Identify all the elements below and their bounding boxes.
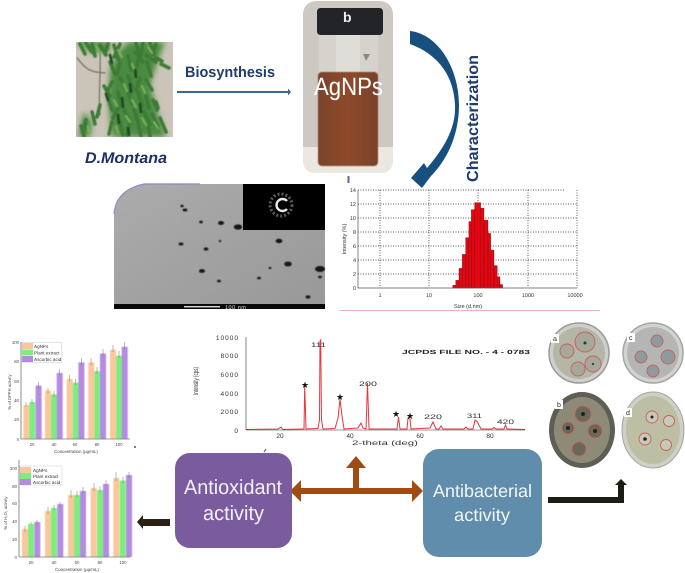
gridlines [358, 190, 577, 288]
x tick labels [276, 433, 494, 440]
x tick labels [29, 560, 127, 565]
y tick labels: 6000 [221, 372, 239, 379]
box: Antibacterial activity [423, 449, 542, 557]
x tick labels: 10000 [567, 293, 583, 299]
peak labels: 220 [424, 414, 443, 421]
star markers [301, 380, 414, 421]
y axis title: Intensity (%) [342, 224, 348, 254]
y tick labels: 12 [350, 202, 356, 208]
x tick labels: 60 [75, 560, 80, 565]
legend: AgNPs [34, 344, 49, 349]
box: Antibacterial activity: activity [454, 505, 510, 525]
dish a [549, 323, 609, 383]
JCPDS label: JCPDS FILE NO. - 4 - 0783 [402, 349, 531, 356]
panel: antibacterial petri dishes [549, 323, 684, 468]
x tick labels: 20 [30, 442, 35, 447]
x tick labels: 40 [52, 442, 57, 447]
mark: small purple tick [348, 176, 350, 183]
arrow: characterization curve [410, 31, 459, 188]
legend: AgNPs [33, 468, 48, 473]
x tick labels: 1000 [522, 293, 534, 299]
x tick labels: 100 [119, 560, 127, 565]
legend: Plant extract [33, 474, 59, 479]
y axis title: % of DPPH activity [7, 374, 12, 410]
x tick labels: 100 [115, 442, 123, 447]
peak labels: 311 [467, 413, 483, 420]
y axis title: Intensity (cps) [192, 367, 200, 395]
x tick labels: 20 [276, 433, 284, 440]
star markers: ★ [336, 392, 344, 402]
x tick labels: 60 [73, 442, 78, 447]
peak labels: 200 [359, 381, 378, 388]
x axis title: 2-theta (deg) [352, 440, 418, 447]
peak labels: 420 [497, 419, 515, 426]
star markers: ★ [301, 380, 309, 390]
chart: DPPH activity [7, 340, 130, 454]
y tick labels: 100 [10, 466, 18, 471]
chart: XRD pattern [192, 335, 531, 447]
dish b [549, 392, 615, 468]
y tick labels [10, 466, 18, 560]
y tick labels: 10000 [216, 335, 239, 342]
y tick labels: 6 [353, 244, 356, 250]
photo: AgNPs vial [303, 1, 393, 173]
box: Antioxidant activity [175, 453, 292, 548]
legend [22, 342, 62, 362]
y tick labels [216, 335, 239, 435]
histogram bars [453, 203, 503, 288]
arrow: biosynthesis [177, 88, 291, 96]
label: D.Montana: D.Montana [85, 150, 167, 167]
legend [20, 466, 62, 485]
x tick labels [30, 442, 123, 447]
box: Antioxidant activity: Antioxidant [184, 476, 282, 499]
dish b: b [557, 401, 561, 409]
label: Biosynthesis: Biosynthesis [185, 64, 275, 81]
x tick labels: 10 [426, 293, 432, 299]
chart: DLS size distribution [340, 188, 600, 311]
x axis title: Concentration (µg/mL) [54, 449, 98, 454]
y tick labels: 100 [12, 340, 20, 345]
arrow: three-way brown connector [290, 456, 423, 502]
scale bar: 100 nm [225, 305, 246, 311]
y tick labels: 40 [12, 519, 18, 524]
x tick labels: 60 [416, 433, 424, 440]
y tick labels: 4000 [221, 391, 239, 398]
x tick labels [378, 293, 583, 299]
y tick labels: 60 [12, 501, 18, 506]
peak labels [311, 342, 515, 426]
y tick labels [12, 340, 20, 442]
y tick labels: 20 [12, 537, 18, 542]
box: Antioxidant activity: activity [203, 502, 265, 525]
panel: TEM micrograph [114, 184, 325, 311]
y tick labels: 8000 [221, 353, 239, 360]
y tick labels: 0 [15, 555, 18, 560]
y tick labels: 2 [353, 272, 356, 278]
legend: Plant extract [34, 350, 60, 356]
x tick labels: 40 [52, 560, 57, 565]
dish d [622, 392, 684, 468]
error bars [26, 342, 124, 407]
x tick labels: 1 [378, 293, 382, 299]
arrow: to H2O2 chart [137, 515, 170, 529]
error bars [25, 472, 129, 532]
y tick labels: 80 [14, 359, 20, 364]
dish c: c [629, 335, 633, 342]
x tick labels: 80 [486, 433, 494, 440]
x tick labels: 80 [95, 442, 100, 447]
arrow: to petri dishes [548, 479, 627, 503]
y tick labels: 0 [17, 437, 20, 442]
bars [23, 347, 128, 439]
dish d: d [626, 409, 630, 417]
x axis title: Concentration (µg/mL) [55, 567, 99, 572]
legend: Ascorbic acid [34, 357, 62, 362]
photo: D. montana plant [76, 42, 173, 137]
x tick labels: 40 [346, 433, 354, 440]
star markers: ★ [392, 409, 400, 419]
y tick labels: 40 [14, 398, 20, 403]
y tick labels: 4 [353, 258, 356, 264]
y axis [246, 337, 525, 430]
dish a: a [553, 336, 557, 343]
x tick labels: 80 [98, 560, 103, 565]
y tick labels: 8 [353, 230, 356, 236]
y tick labels: 14 [350, 188, 356, 194]
y tick labels [350, 188, 356, 292]
chart: H2O2 activity [3, 460, 132, 572]
label: AgNPs: AgNPs [314, 73, 383, 101]
cap letter: b [343, 9, 352, 25]
legend: Ascorbic acid [33, 480, 61, 485]
label: Characterization: Characterization [465, 55, 482, 182]
y tick labels: 0 [353, 286, 356, 292]
y tick labels: 2000 [221, 409, 239, 416]
box: Antibacterial activity: Antibacterial [433, 481, 532, 501]
y axis title: % of H₂O₂ activity [3, 496, 8, 530]
peak labels: 111 [311, 342, 327, 349]
x tick labels: 100 [473, 293, 483, 299]
x tick labels: 20 [29, 560, 34, 565]
y tick labels: 10 [350, 216, 356, 222]
y tick labels: 20 [14, 417, 20, 422]
mark: small dot [134, 446, 136, 448]
dish c [623, 323, 683, 383]
vial cap [317, 8, 383, 35]
mark: small purple tick [264, 449, 266, 452]
x axis title: Size (d.nm) [454, 304, 482, 310]
star markers: ★ [406, 411, 414, 421]
y tick labels: 0 [234, 428, 239, 435]
y tick labels: 60 [14, 379, 20, 384]
diffraction trace [246, 340, 525, 430]
y tick labels: 80 [12, 484, 18, 489]
axes [358, 190, 577, 288]
electron diffraction inset [243, 184, 325, 230]
scale bar [114, 304, 325, 311]
bars [22, 475, 132, 557]
